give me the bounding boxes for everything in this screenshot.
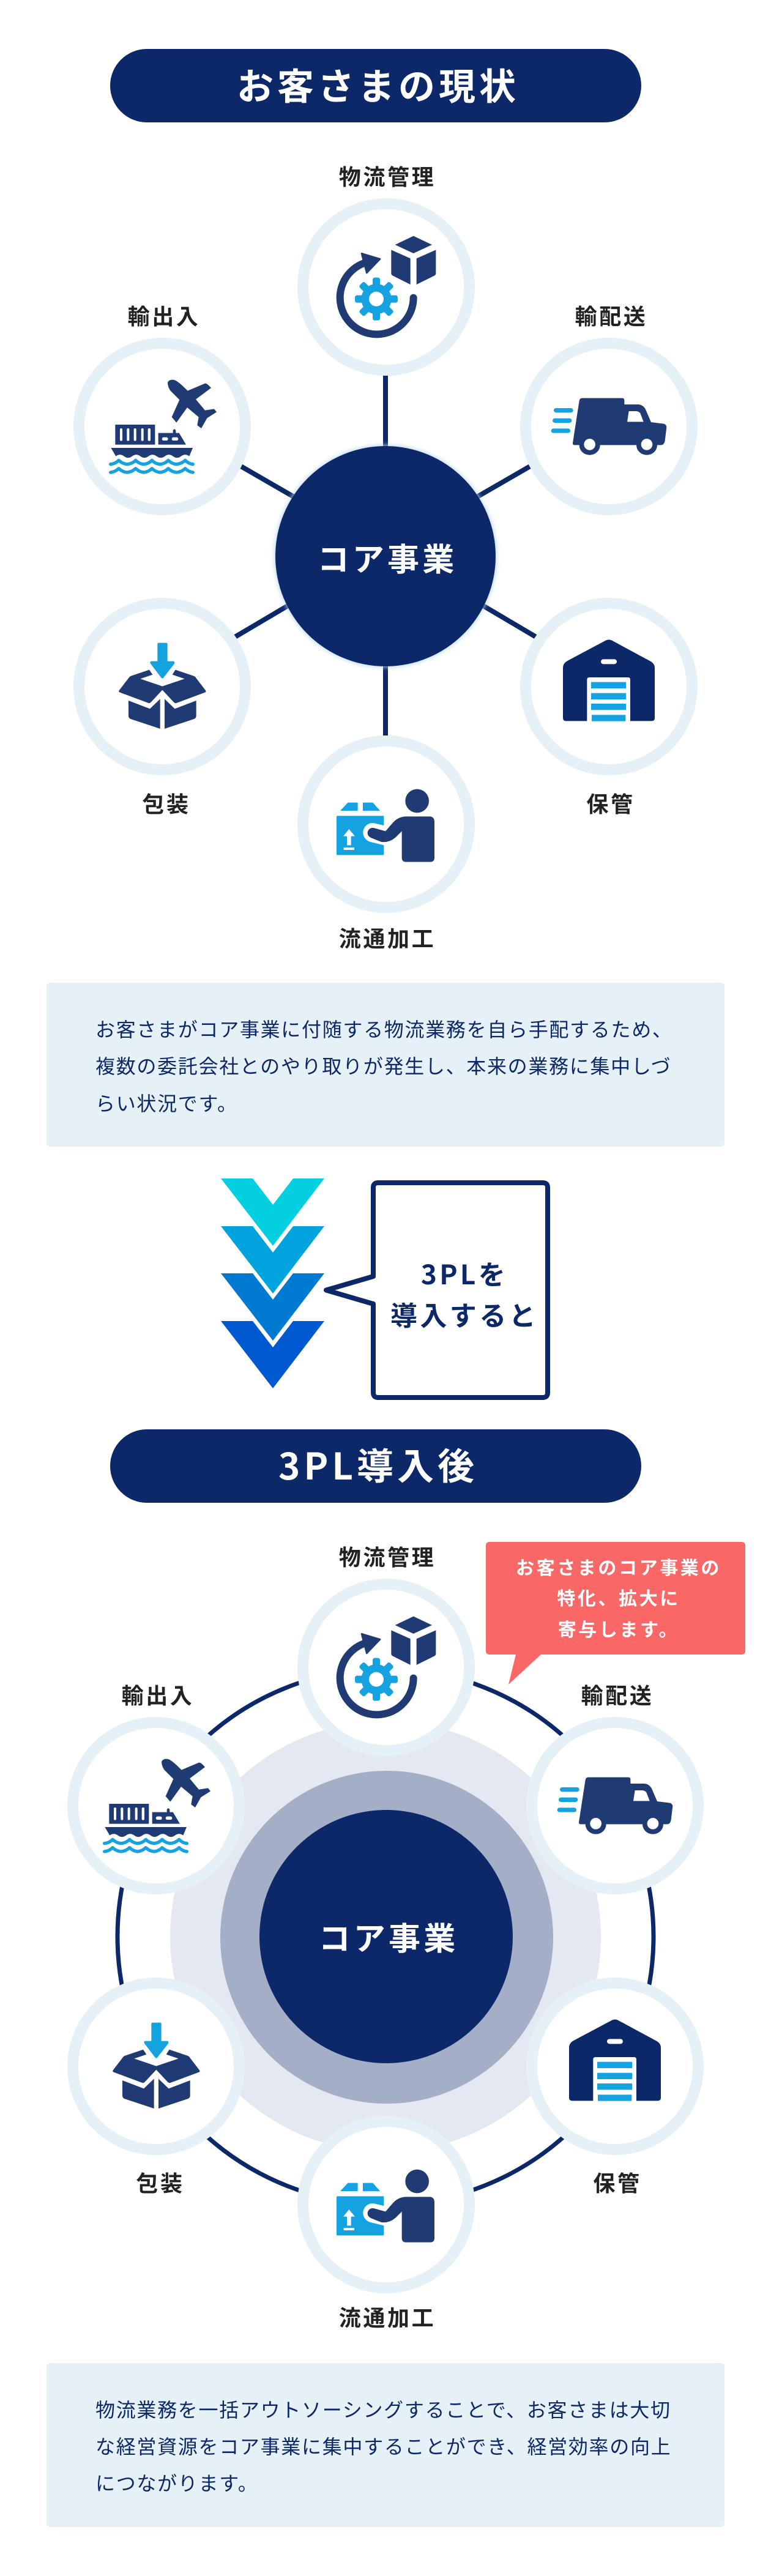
panel: after introduction text: な経営資源をコア事業に集中することができ、経営効率の向上 (95, 2432, 671, 2460)
core business circle: コア事業 (318, 534, 457, 580)
icon: truck (553, 398, 666, 455)
speech bubble: introducing 3PL: 3PLを (421, 1253, 508, 1292)
heading: after introducing 3PL (110, 1429, 641, 1503)
circle: storage (526, 603, 692, 770)
label: import export: 輸出入 (128, 299, 200, 331)
icon: ship and plane (111, 380, 217, 472)
heading: current situation (110, 49, 641, 122)
circle: processing (303, 2121, 469, 2288)
panel: current situation text: お客さまがコア事業に付随する物流業務を自ら手配するため、 (95, 1014, 673, 1043)
label: delivery: 輸配送 (581, 1678, 654, 1710)
icon: warehouse (569, 2019, 661, 2101)
circle: processing (303, 741, 469, 907)
label: packaging: 包装 (142, 787, 191, 819)
icon: gear and box (340, 236, 436, 334)
label: storage: 保管 (593, 2166, 642, 2198)
panel: current situation text: らい状況です。 (95, 1089, 238, 1117)
callout: core business benefit (486, 1542, 745, 1684)
heading: current situation: お客さまの現状 (237, 58, 520, 111)
diagram: after introducing 3PL (73, 1540, 745, 2332)
icon: box with arrow (119, 643, 206, 729)
core business concentric circles: コア事業 (319, 1913, 458, 1959)
callout: core business benefit: お客さまのコア事業の (516, 1553, 721, 1580)
label: packaging: 包装 (136, 2166, 185, 2198)
icon: box with arrow (113, 2023, 199, 2109)
circle: delivery (532, 1722, 698, 1889)
circle: storage (532, 1983, 698, 2150)
panel: current situation text: 複数の委託会社とのやり取りが発生し、本来の業務に集中しづ (95, 1051, 671, 1079)
callout: core business benefit: 特化、拡大に (557, 1584, 680, 1610)
core business concentric circles (170, 1721, 601, 2152)
label: logistics management: 物流管理 (339, 1540, 436, 1572)
heading: after introducing 3PL: 3PL導入後 (278, 1437, 478, 1491)
panel: current situation text (47, 983, 724, 1147)
circle: logistics management (303, 204, 469, 370)
callout: core business benefit: 寄与します。 (558, 1615, 679, 1642)
circle: logistics management (303, 1584, 469, 1751)
panel: after introduction text: につながります。 (95, 2468, 258, 2496)
icon: ship and plane (105, 1759, 210, 1852)
panel: after introduction text (47, 2363, 724, 2527)
label: processing: 流通加工 (339, 2301, 436, 2332)
label: delivery: 輸配送 (575, 299, 647, 331)
outer circular flow line (117, 1669, 654, 2205)
arrows: downward chevrons (221, 1178, 324, 1388)
label: import export: 輸出入 (122, 1678, 194, 1710)
diagram: current situation (79, 160, 692, 953)
icon: person holding box (337, 2170, 434, 2243)
circle: packaging (79, 603, 245, 770)
icon: warehouse (563, 639, 655, 721)
circle: import export (73, 1722, 239, 1889)
circle: import export (79, 343, 245, 510)
icon: person holding box (337, 789, 434, 862)
connector lines (235, 373, 536, 737)
panel: after introduction text: 物流業務を一括アウトソーシングすることで、お客さまは大切 (95, 2395, 671, 2423)
icon: truck (559, 1778, 672, 1834)
icon: gear and box (340, 1617, 436, 1714)
label: logistics management: 物流管理 (339, 160, 436, 192)
speech bubble: introducing 3PL: 導入すると (390, 1294, 538, 1333)
circle: delivery (526, 343, 692, 510)
core business circle (275, 445, 496, 667)
label: processing: 流通加工 (339, 921, 436, 953)
speech bubble: introducing 3PL (326, 1183, 548, 1398)
label: storage: 保管 (586, 787, 635, 819)
circle: packaging (73, 1983, 239, 2150)
